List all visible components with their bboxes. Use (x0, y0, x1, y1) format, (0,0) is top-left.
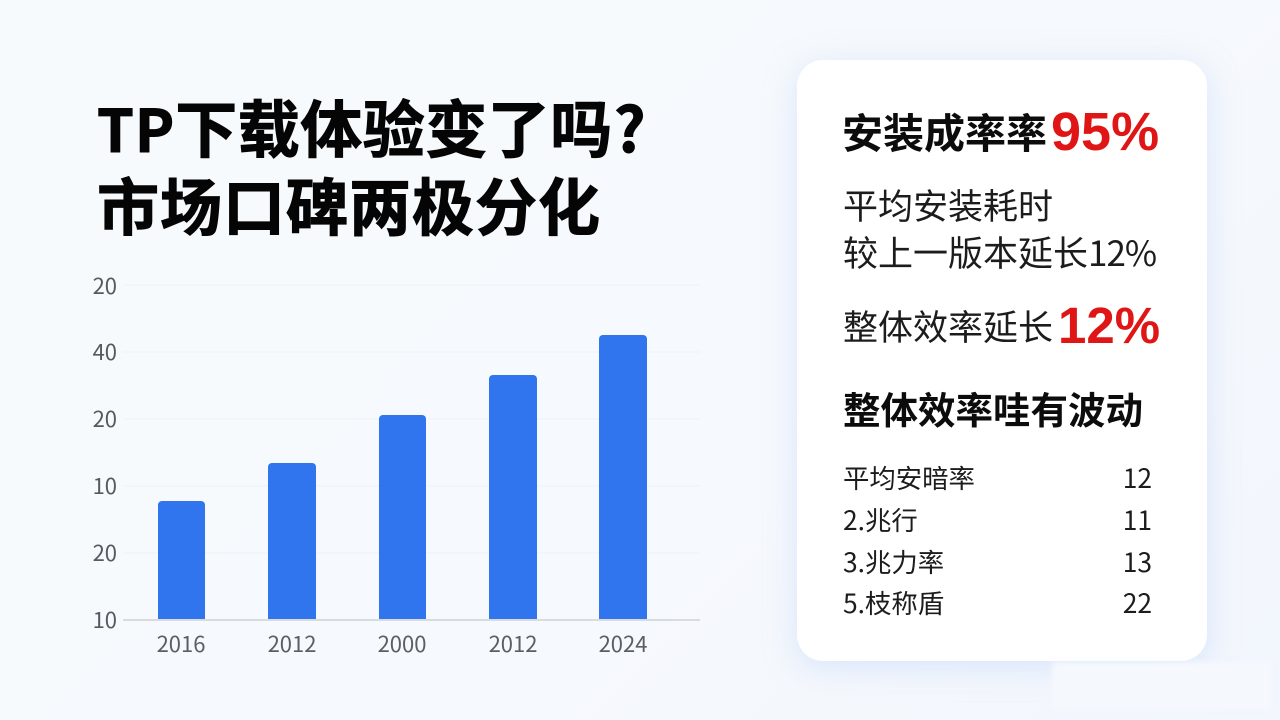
x axis labels: 2012 (268, 627, 316, 659)
metric: average install time (843, 179, 1156, 277)
ranked list: 13 (1123, 541, 1152, 580)
panel: metrics card (797, 60, 1207, 661)
ranked list: 11 (1123, 499, 1152, 538)
ranked list: 2.兆行 (843, 499, 918, 538)
y axis labels (93, 269, 117, 635)
text: 整体效率延长 (843, 300, 1053, 351)
y axis labels: 10 (93, 603, 117, 635)
title: TP下载体验变了吗? (97, 80, 646, 170)
x axis labels: 2012 (489, 627, 537, 659)
metric: average install time: 平均安装耗时 (843, 179, 1053, 230)
metric: install success rate (842, 100, 1159, 162)
y axis labels: 40 (93, 335, 117, 367)
text: 95% (1051, 102, 1159, 162)
y axis labels: 20 (93, 269, 117, 301)
ranked list: 3.兆力率 (843, 541, 944, 580)
x axis labels: 2016 (157, 627, 205, 659)
ranked list: 12 (1123, 457, 1152, 496)
ranked list: 22 (1123, 582, 1152, 621)
ranked list: 5.枝称盾 (843, 582, 944, 621)
title: 市场口碑两极分化 (97, 158, 601, 248)
ranked list (843, 457, 1152, 621)
title (97, 80, 646, 248)
x axis labels (157, 627, 647, 659)
y axis labels: 20 (93, 402, 117, 434)
bars (158, 335, 647, 619)
text: 12% (1058, 297, 1160, 354)
metric: average install time: 较上一版本延长12% (843, 226, 1156, 277)
faint blurred patch below card (1052, 662, 1272, 710)
subheading: 整体效率哇有波动 (843, 380, 1143, 435)
ranked list: 平均安暗率 (843, 457, 975, 496)
y axis labels: 20 (93, 536, 117, 568)
metric: overall efficiency (843, 297, 1160, 354)
y axis labels: 10 (93, 469, 117, 501)
text: 安装成率率 (842, 100, 1047, 160)
x axis labels: 2000 (378, 627, 426, 659)
x axis labels: 2024 (599, 627, 647, 659)
